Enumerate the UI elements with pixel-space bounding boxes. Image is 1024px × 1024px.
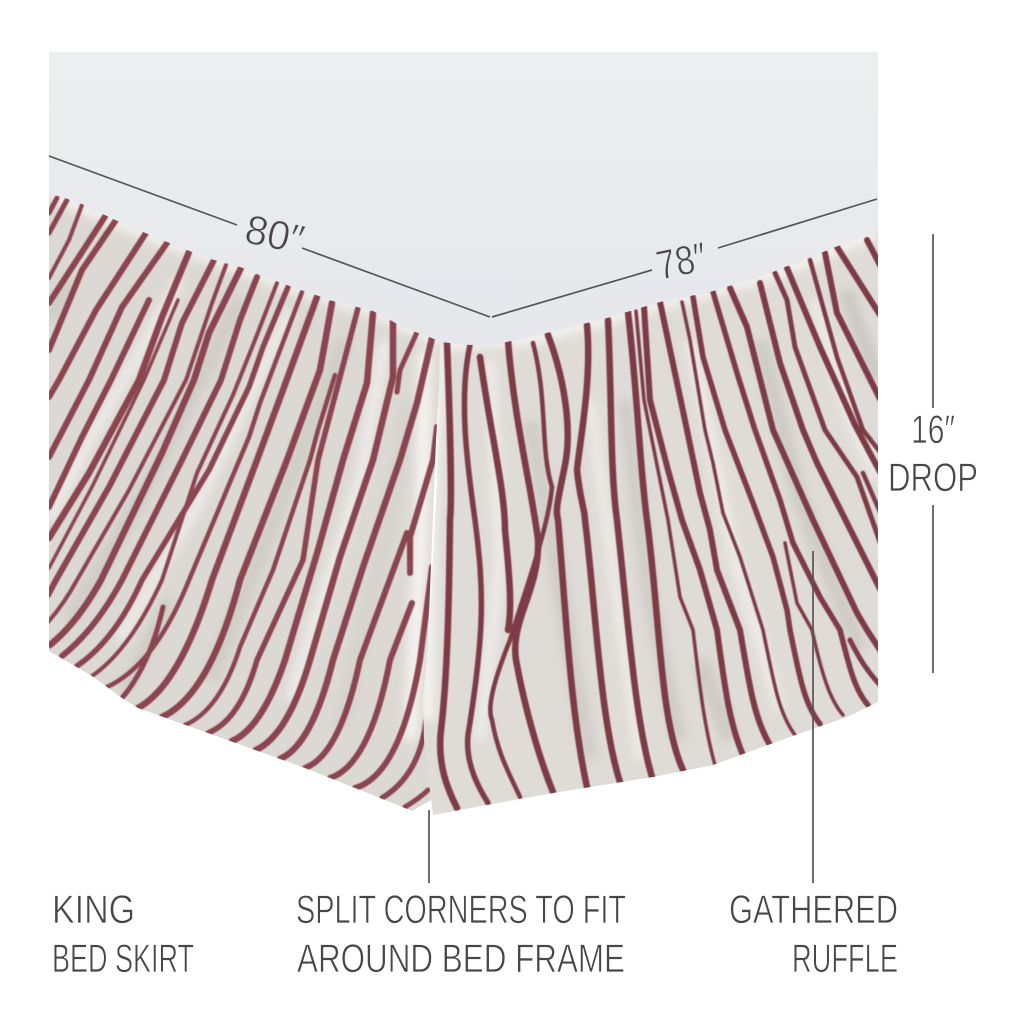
dimension: 78 inch length bbox=[492, 199, 877, 317]
fabric folds left bbox=[49, 193, 442, 740]
callout: gathered ruffle: RUFFLE bbox=[792, 937, 898, 981]
label: king bed skirt: KING bbox=[52, 888, 135, 932]
dimension: 78 inch length: 78″ bbox=[652, 233, 711, 289]
panel: right bed skirt side with red stripes bbox=[420, 225, 880, 825]
left stripes bbox=[48, 198, 437, 807]
dimension: 16 inch drop bbox=[888, 234, 978, 673]
callout: gathered ruffle: GATHERED bbox=[729, 888, 898, 932]
label: king bed skirt: BED SKIRT bbox=[52, 937, 194, 981]
dimension: 16 inch drop: 16″ bbox=[911, 408, 955, 452]
callout: split corners bbox=[296, 810, 626, 981]
bed top sheet bbox=[49, 52, 878, 346]
callout: split corners: AROUND BED FRAME bbox=[297, 937, 625, 981]
dimension: 80 inch width: 80″ bbox=[241, 206, 308, 263]
dimension: 16 inch drop: DROP bbox=[888, 456, 978, 500]
panel: left bed skirt side with red stripes bbox=[48, 190, 449, 820]
label: king bed skirt bbox=[52, 888, 194, 981]
callout: split corners: SPLIT CORNERS TO FIT bbox=[296, 888, 626, 932]
callout: gathered ruffle bbox=[729, 551, 898, 981]
fabric folds right bbox=[427, 232, 878, 760]
dimension: 80 inch width bbox=[49, 156, 490, 317]
right stripes bbox=[440, 240, 880, 808]
